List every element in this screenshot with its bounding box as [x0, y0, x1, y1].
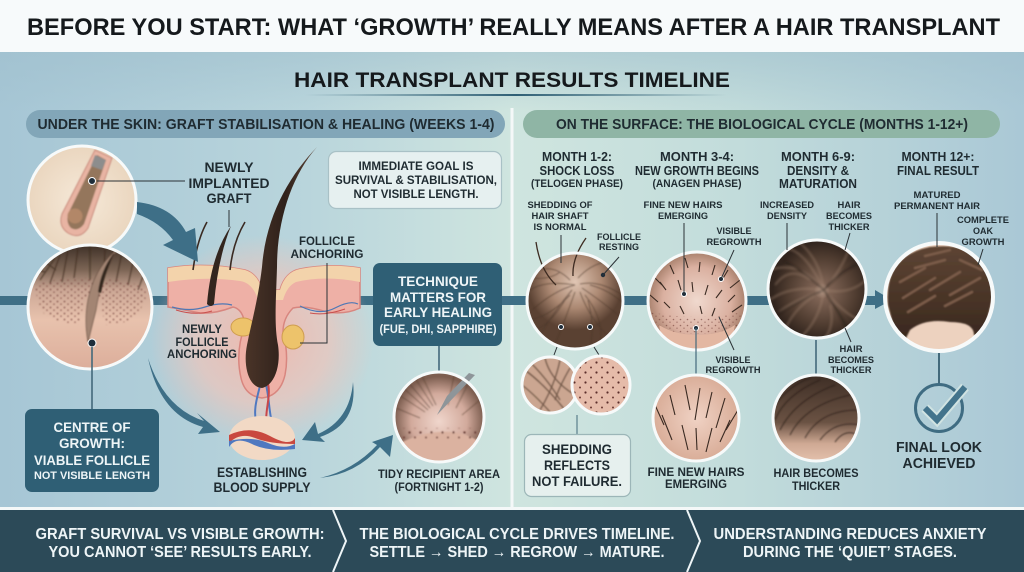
- label: follicle anchoring: FOLLICLE: [299, 234, 355, 248]
- labels: month 12+ callouts: MATURED: [914, 190, 961, 201]
- label: establishing blood supply: [214, 465, 310, 495]
- skin cross-section diagram: [150, 147, 374, 445]
- header: under the skin: UNDER THE SKIN: GRAFT STABILISATION & HEALING (WEEKS 1-4): [38, 116, 494, 133]
- takeaway: graft survival: GRAFT SURVIVAL VS VISIBLE GROWTH:: [36, 526, 324, 543]
- label: newly follicle anchoring: ANCHORING: [167, 347, 237, 361]
- arrow: graft to skin: [137, 202, 198, 262]
- labels: month 6-9 callouts: BECOMES: [828, 355, 874, 366]
- label: final look achieved: ACHIEVED: [902, 455, 976, 472]
- takeaway: biological cycle: [360, 526, 674, 561]
- labels: month 6-9 callouts: [760, 200, 874, 376]
- header: under the skin: [26, 110, 505, 138]
- timeline heading: HAIR TRANSPLANT RESULTS TIMELINE: [294, 69, 730, 92]
- labels: month 1-2 callouts: FOLLICLE: [597, 232, 641, 243]
- label: tidy recipient area: (FORTNIGHT 1-2): [394, 480, 484, 494]
- top title banner: [0, 0, 1024, 52]
- label: newly implanted graft: NEWLY: [204, 159, 254, 175]
- labels: month 3-4 callouts: REGROWTH: [706, 365, 761, 376]
- timeline bar: [0, 290, 892, 309]
- callout: shedding reflects not failure: REFLECTS: [544, 457, 610, 473]
- circle: tidy recipient area: [394, 346, 484, 470]
- label: newly follicle anchoring: FOLLICLE: [176, 335, 228, 349]
- month 6-9 density scalp circle: [768, 240, 866, 338]
- stage heading: month 6-9: [779, 149, 857, 191]
- label: newly implanted graft: GRAFT: [206, 190, 252, 206]
- callout: centre of growth: VIABLE FOLLICLE: [34, 452, 150, 468]
- labels: month 6-9 callouts: HAIR: [840, 344, 863, 355]
- labels: month 6-9 callouts: BECOMES: [826, 211, 872, 222]
- stage heading: month 1-2: MONTH 1-2:: [542, 149, 612, 164]
- labels: month 3-4 callouts: EMERGING: [658, 211, 708, 222]
- labels: month 6-9 callouts: THICKER: [828, 222, 870, 233]
- stage heading: month 12+: FINAL RESULT: [897, 163, 979, 178]
- small circle: resting follicles close-up: [572, 356, 630, 414]
- labels: month 12+ callouts: COMPLETE: [957, 215, 1009, 226]
- arrow: hairline to blood supply: [148, 358, 220, 434]
- header: on the surface: [523, 110, 1000, 138]
- label: hair becomes thicker: THICKER: [792, 479, 840, 493]
- labels: month 3-4 callouts: REGROWTH: [706, 237, 762, 248]
- callout: shedding reflects not failure: SHEDDING: [542, 441, 612, 457]
- label: hair becomes thicker: HAIR BECOMES: [774, 466, 858, 480]
- takeaway: understanding: UNDERSTANDING REDUCES ANXIETY: [714, 526, 987, 543]
- arrow: right side to blood supply: [302, 382, 354, 442]
- small circle: shedding hair close-up: [522, 357, 578, 413]
- label: newly implanted graft: IMPLANTED: [188, 175, 270, 191]
- lower circle: fine new hairs: [653, 375, 739, 461]
- callout: technique matters: [373, 263, 502, 346]
- stage heading: month 1-2: [531, 149, 623, 190]
- central panel divider: [510, 108, 514, 507]
- callout: technique matters: MATTERS FOR: [390, 289, 486, 305]
- label: establishing blood supply: BLOOD SUPPLY: [214, 480, 310, 495]
- label: fine new hairs emerging: EMERGING: [665, 477, 727, 491]
- bottom takeaway banner: [0, 507, 1024, 572]
- callout: centre of growth: NOT VISIBLE LENGTH: [34, 470, 150, 482]
- circle: implanted graft close-up: [28, 146, 136, 254]
- labels: month 12+ callouts: [894, 190, 1009, 265]
- labels: month 6-9 callouts: DENSITY: [767, 211, 808, 222]
- stage heading: month 3-4: [635, 149, 759, 190]
- month 12+ final result head circle: [885, 243, 993, 351]
- callout: shedding reflects not failure: [524, 415, 630, 496]
- callout: immediate goal: [328, 152, 502, 208]
- month 3-4 regrowth scalp circle: [648, 252, 746, 350]
- labels: month 6-9 callouts: INCREASED: [760, 200, 814, 211]
- label: tidy recipient area: [378, 467, 500, 494]
- label: establishing blood supply: ESTABLISHING: [217, 465, 307, 480]
- header: on the surface: ON THE SURFACE: THE BIOLOGICAL CYCLE (MONTHS 1-12+): [556, 116, 968, 133]
- stage heading: month 6-9: DENSITY &: [787, 163, 849, 178]
- label: follicle anchoring: [290, 234, 364, 343]
- stage heading: month 3-4: NEW GROWTH BEGINS: [635, 163, 759, 178]
- stage heading: month 1-2: (TELOGEN PHASE): [531, 178, 623, 190]
- label: tidy recipient area: TIDY RECIPIENT AREA: [378, 467, 500, 481]
- labels: month 3-4 callouts: VISIBLE: [716, 355, 750, 366]
- labels: month 12+ callouts: GROWTH: [962, 237, 1005, 248]
- callout: immediate goal: IMMEDIATE GOAL IS: [358, 159, 474, 173]
- stage heading: month 3-4: MONTH 3-4:: [660, 149, 734, 164]
- takeaway: graft survival: [36, 526, 324, 561]
- callout: centre of growth: CENTRE OF: [54, 419, 131, 435]
- label: fine new hairs emerging: [648, 465, 744, 491]
- labels: month 12+ callouts: OAK: [973, 226, 993, 237]
- labels: month 3-4 callouts: VISIBLE: [716, 226, 752, 237]
- label: final look achieved: FINAL LOOK: [896, 439, 982, 456]
- labels: month 1-2 callouts: [528, 200, 641, 355]
- stage heading: month 1-2: SHOCK LOSS: [540, 163, 615, 178]
- callout: centre of growth: [25, 347, 159, 492]
- month 1-2 shedding scalp circle: [527, 238, 625, 349]
- callout: immediate goal: NOT VISIBLE LENGTH.: [354, 187, 478, 201]
- blood supply illustration: [229, 416, 295, 460]
- labels: month 1-2 callouts: RESTING: [599, 242, 639, 253]
- callout: immediate goal: SURVIVAL & STABILISATION,: [335, 173, 497, 187]
- labels: month 3-4 callouts: [644, 200, 762, 377]
- arrow: blood supply to recipient area: [320, 435, 393, 478]
- labels: month 12+ callouts: PERMANENT HAIR: [894, 201, 980, 212]
- callout: shedding reflects not failure: NOT FAILURE.: [532, 473, 622, 489]
- label: newly follicle anchoring: NEWLY: [182, 322, 222, 336]
- takeaway: biological cycle: THE BIOLOGICAL CYCLE DRIVES TIMELINE.: [360, 526, 674, 543]
- takeaway: understanding: DURING THE ‘QUIET’ STAGES.: [743, 544, 957, 561]
- labels: month 1-2 callouts: SHEDDING OF: [528, 200, 593, 211]
- label: final look achieved: [896, 439, 982, 472]
- lower circle: hair becomes thicker: [773, 375, 860, 461]
- stage heading: month 12+: [897, 149, 979, 178]
- label: newly implanted graft: [97, 159, 270, 227]
- callout: centre of growth: GROWTH:: [59, 435, 125, 451]
- stage heading: month 12+: MONTH 12+:: [902, 149, 974, 164]
- labels: month 1-2 callouts: IS NORMAL: [534, 222, 587, 233]
- callout: technique matters: TECHNIQUE: [398, 273, 478, 289]
- icon: final look check mark: [916, 353, 965, 432]
- callout: technique matters: (FUE, DHI, SAPPHIRE): [380, 324, 497, 336]
- callout: technique matters: EARLY HEALING: [384, 304, 492, 320]
- takeaway: biological cycle: SETTLE → SHED → REGROW → MATURE.: [370, 544, 664, 561]
- circle: hairline centre of growth: [28, 245, 152, 369]
- stage heading: month 3-4: (ANAGEN PHASE): [652, 178, 742, 190]
- label: hair becomes thicker: [774, 466, 858, 493]
- labels: month 3-4 callouts: FINE NEW HAIRS: [644, 200, 722, 211]
- top title banner: BEFORE YOU START: WHAT ‘GROWTH’ REALLY MEANS AFTER A HAIR TRANSPLANT: [27, 14, 1000, 41]
- label: follicle anchoring: ANCHORING: [290, 247, 364, 261]
- labels: month 6-9 callouts: THICKER: [830, 365, 872, 376]
- labels: month 1-2 callouts: HAIR SHAFT: [532, 211, 589, 222]
- stage heading: month 6-9: MATURATION: [779, 176, 857, 191]
- label: fine new hairs emerging: FINE NEW HAIRS: [648, 465, 744, 479]
- stage heading: month 6-9: MONTH 6-9:: [781, 149, 855, 164]
- label: newly follicle anchoring: [167, 322, 237, 361]
- takeaway: graft survival: YOU CANNOT ‘SEE’ RESULTS EARLY.: [48, 544, 312, 561]
- labels: month 6-9 callouts: HAIR: [838, 200, 861, 211]
- takeaway: understanding: [714, 526, 987, 561]
